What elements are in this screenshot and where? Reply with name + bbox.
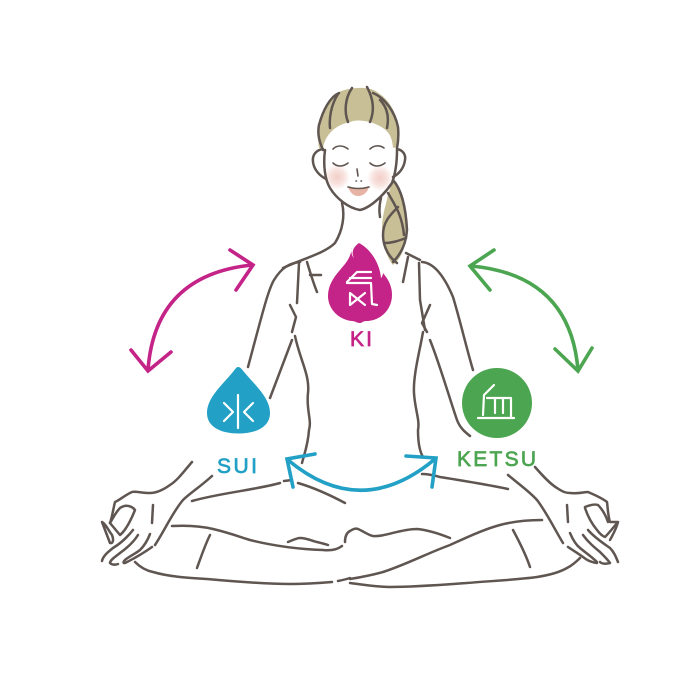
mouth [348,187,369,196]
left arm and hand [102,462,212,565]
hair strands [318,87,398,150]
cheeks [324,164,393,191]
arrow: blue sui to ketsu [287,454,436,490]
neck and ponytail lines [283,180,420,268]
ponytail fill [382,180,406,265]
illustration: meditating woman [102,87,618,587]
hair fill [318,88,398,148]
facial features [333,146,385,181]
label: KETSU: KETSU [457,448,536,471]
ketsu badge [457,368,536,471]
right arm and hand [508,467,618,564]
sui badge [207,367,270,478]
torso and arms [248,257,473,463]
arrow: pink ki to sui [131,250,253,371]
ki badge [328,243,392,351]
face outline and ears [313,149,405,210]
label: SUI: SUI [217,455,257,478]
icon: green circle with ketsu kanji [462,368,532,438]
icon: flame with ki kanji [328,243,392,323]
arrow: green ki to ketsu [470,250,592,371]
icon: water drop with sui kanji [207,367,270,434]
waist and legs [135,474,580,587]
label: KI: KI [350,328,372,351]
